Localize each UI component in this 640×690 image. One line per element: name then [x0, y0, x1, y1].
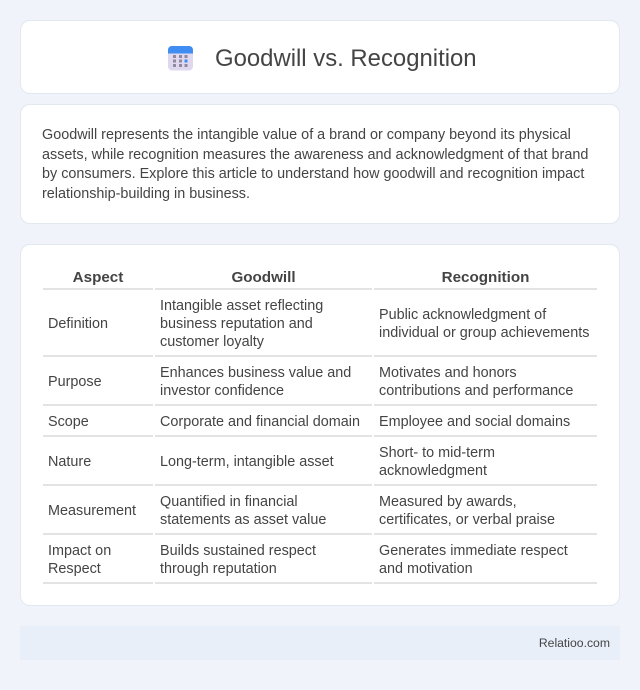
intro panel [20, 104, 620, 224]
row: Nature: Short- to mid-term [379, 445, 495, 461]
header panel [20, 20, 620, 94]
row: Impact on Respect: Builds sustained respect [160, 543, 316, 559]
table panel [20, 244, 620, 606]
row: Scope: Employee and social domains [379, 414, 570, 430]
intro text: relationship-building in business. [42, 186, 250, 202]
row: Purpose: Purpose [48, 374, 102, 390]
row: Nature: Long-term, intangible asset [160, 454, 334, 470]
row: Definition: Public acknowledgment of [379, 307, 546, 323]
column headings: Recognition [442, 269, 529, 286]
intro text: assets, while recognition measures the awareness and acknowledgment of that brand [42, 146, 588, 162]
intro text: Goodwill represents the intangible value of a brand or company beyond its physical [42, 127, 571, 143]
row: Definition [48, 298, 589, 350]
footer bar [20, 626, 620, 660]
row: Impact on Respect [48, 543, 568, 577]
footer credit: Relatioo.com [539, 636, 610, 650]
row: Purpose: investor confidence [160, 383, 284, 399]
column headings: Goodwill [231, 269, 296, 286]
row: Measurement: Measurement [48, 503, 136, 519]
row: Purpose: contributions and performance [379, 383, 573, 399]
row: Definition: individual or group achievements [379, 325, 589, 341]
row: Definition: customer loyalty [160, 334, 264, 350]
row: Scope: Scope [48, 414, 89, 430]
row: Definition: business reputation and [160, 316, 313, 332]
row: Impact on Respect: Impact on [48, 543, 111, 559]
row: Nature: Nature [48, 454, 91, 470]
column headings [73, 269, 529, 286]
column headings: Aspect [73, 269, 123, 286]
row: Definition: Intangible asset reflecting [160, 298, 323, 314]
row: Impact on Respect: and motivation [379, 561, 473, 577]
intro text: by consumers. Explore this article to understand how goodwill and recognition impact [42, 166, 584, 182]
title: Goodwill vs. Recognition [215, 45, 477, 72]
row: Measurement [48, 494, 555, 528]
row: Purpose: Motivates and honors [379, 365, 517, 381]
row: Measurement: Measured by awards, [379, 494, 517, 510]
row: Scope [48, 414, 570, 430]
row: Measurement: Quantified in financial [160, 494, 298, 510]
row: Measurement: certificates, or verbal praise [379, 512, 555, 528]
icon: calendar [168, 46, 193, 70]
row: Purpose: Enhances business value and [160, 365, 351, 381]
row: Impact on Respect: Respect [48, 561, 101, 577]
row: Scope: Corporate and financial domain [160, 414, 360, 430]
row: Definition: Definition [48, 316, 108, 332]
row: Nature: acknowledgment [379, 463, 487, 479]
row: Measurement: statements as asset value [160, 512, 326, 528]
row: Nature [48, 445, 495, 479]
row: Impact on Respect: through reputation [160, 561, 277, 577]
intro text [42, 127, 588, 202]
row: Impact on Respect: Generates immediate respect [379, 543, 568, 559]
row: Purpose [48, 365, 573, 399]
